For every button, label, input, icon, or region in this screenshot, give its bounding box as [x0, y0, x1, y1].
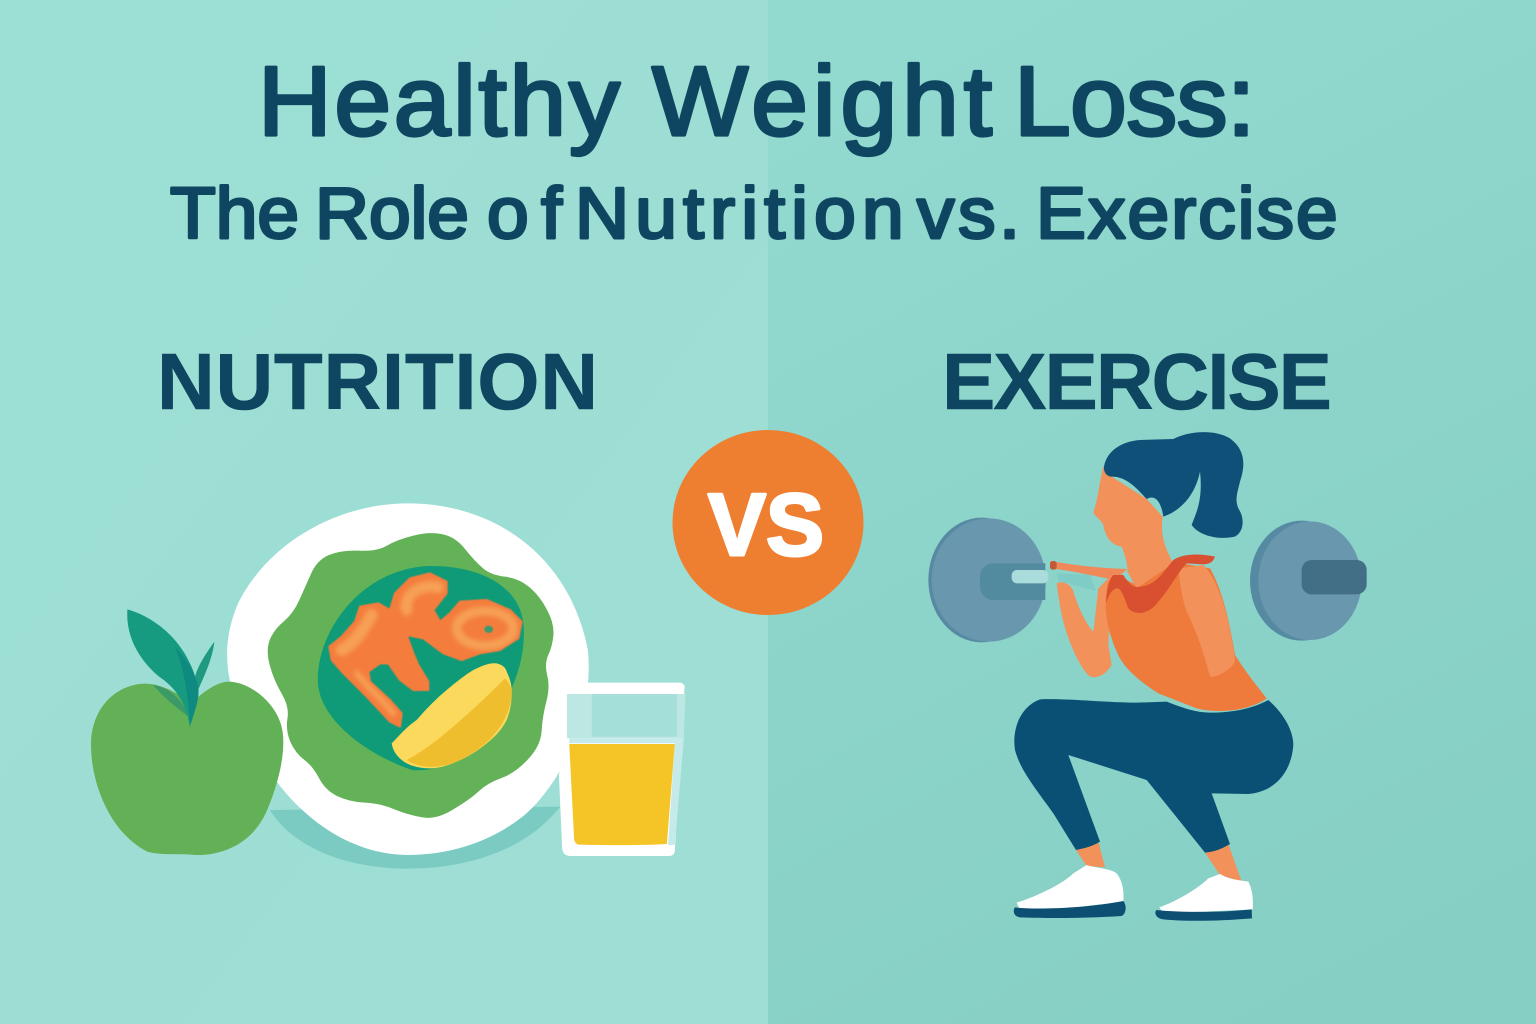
subtitle — [170, 173, 1338, 254]
icon: shoulder — [1178, 565, 1235, 677]
icon: left weight plate — [928, 518, 1046, 642]
vs badge — [672, 430, 864, 615]
subtitle: Exercise — [1036, 173, 1338, 254]
vs badge: VS — [708, 475, 824, 574]
icon: shrimp — [329, 573, 522, 768]
heading: nutrition: NUTRITION — [157, 337, 598, 426]
icon: right shoe — [1155, 874, 1253, 921]
subtitle: of — [487, 173, 562, 254]
icon: lemon wedge shade — [407, 678, 512, 767]
icon: apple leaves — [127, 609, 214, 727]
icon: fingertips — [1050, 561, 1057, 570]
icon: greens centre — [318, 566, 524, 770]
icon: hair and ponytail — [1104, 432, 1243, 538]
icon: bar behind hand — [1057, 573, 1096, 591]
title: Weight — [652, 47, 992, 157]
icon: lemon wedge — [392, 663, 512, 768]
icon: forearm on bar — [1051, 561, 1127, 580]
icon: leggings — [1014, 699, 1293, 853]
icon: food illustration — [91, 503, 685, 869]
icon: barbell — [1012, 570, 1048, 583]
icon: top — [1106, 562, 1267, 711]
subtitle: Nutrition — [575, 173, 904, 254]
icon: lettuce — [268, 533, 554, 818]
title: Healthy — [258, 47, 620, 157]
subtitle: Role — [315, 173, 469, 254]
icon: left shoe — [1014, 865, 1126, 918]
icon: raised arm — [1057, 575, 1112, 677]
icon: right weight plate — [1250, 521, 1367, 641]
icon: apple body — [91, 682, 283, 855]
icon: woman squatting with barbell — [928, 432, 1367, 921]
title: Loss: — [1014, 47, 1255, 157]
panel: exercise background — [768, 0, 1536, 1024]
icon: juice glass — [559, 683, 685, 856]
icon: collar — [1106, 554, 1215, 613]
panel: nutrition background — [0, 0, 768, 1024]
subtitle: The — [170, 173, 299, 254]
icon: right ankle — [1205, 844, 1242, 882]
heading: exercise: EXERCISE — [942, 337, 1332, 426]
icon: head and neck — [1093, 467, 1173, 588]
icon: plate shadow — [270, 807, 560, 869]
title — [258, 47, 1255, 157]
subtitle: vs. — [917, 173, 1020, 254]
icon: left ankle — [1076, 842, 1105, 867]
icon: plate — [227, 503, 589, 855]
